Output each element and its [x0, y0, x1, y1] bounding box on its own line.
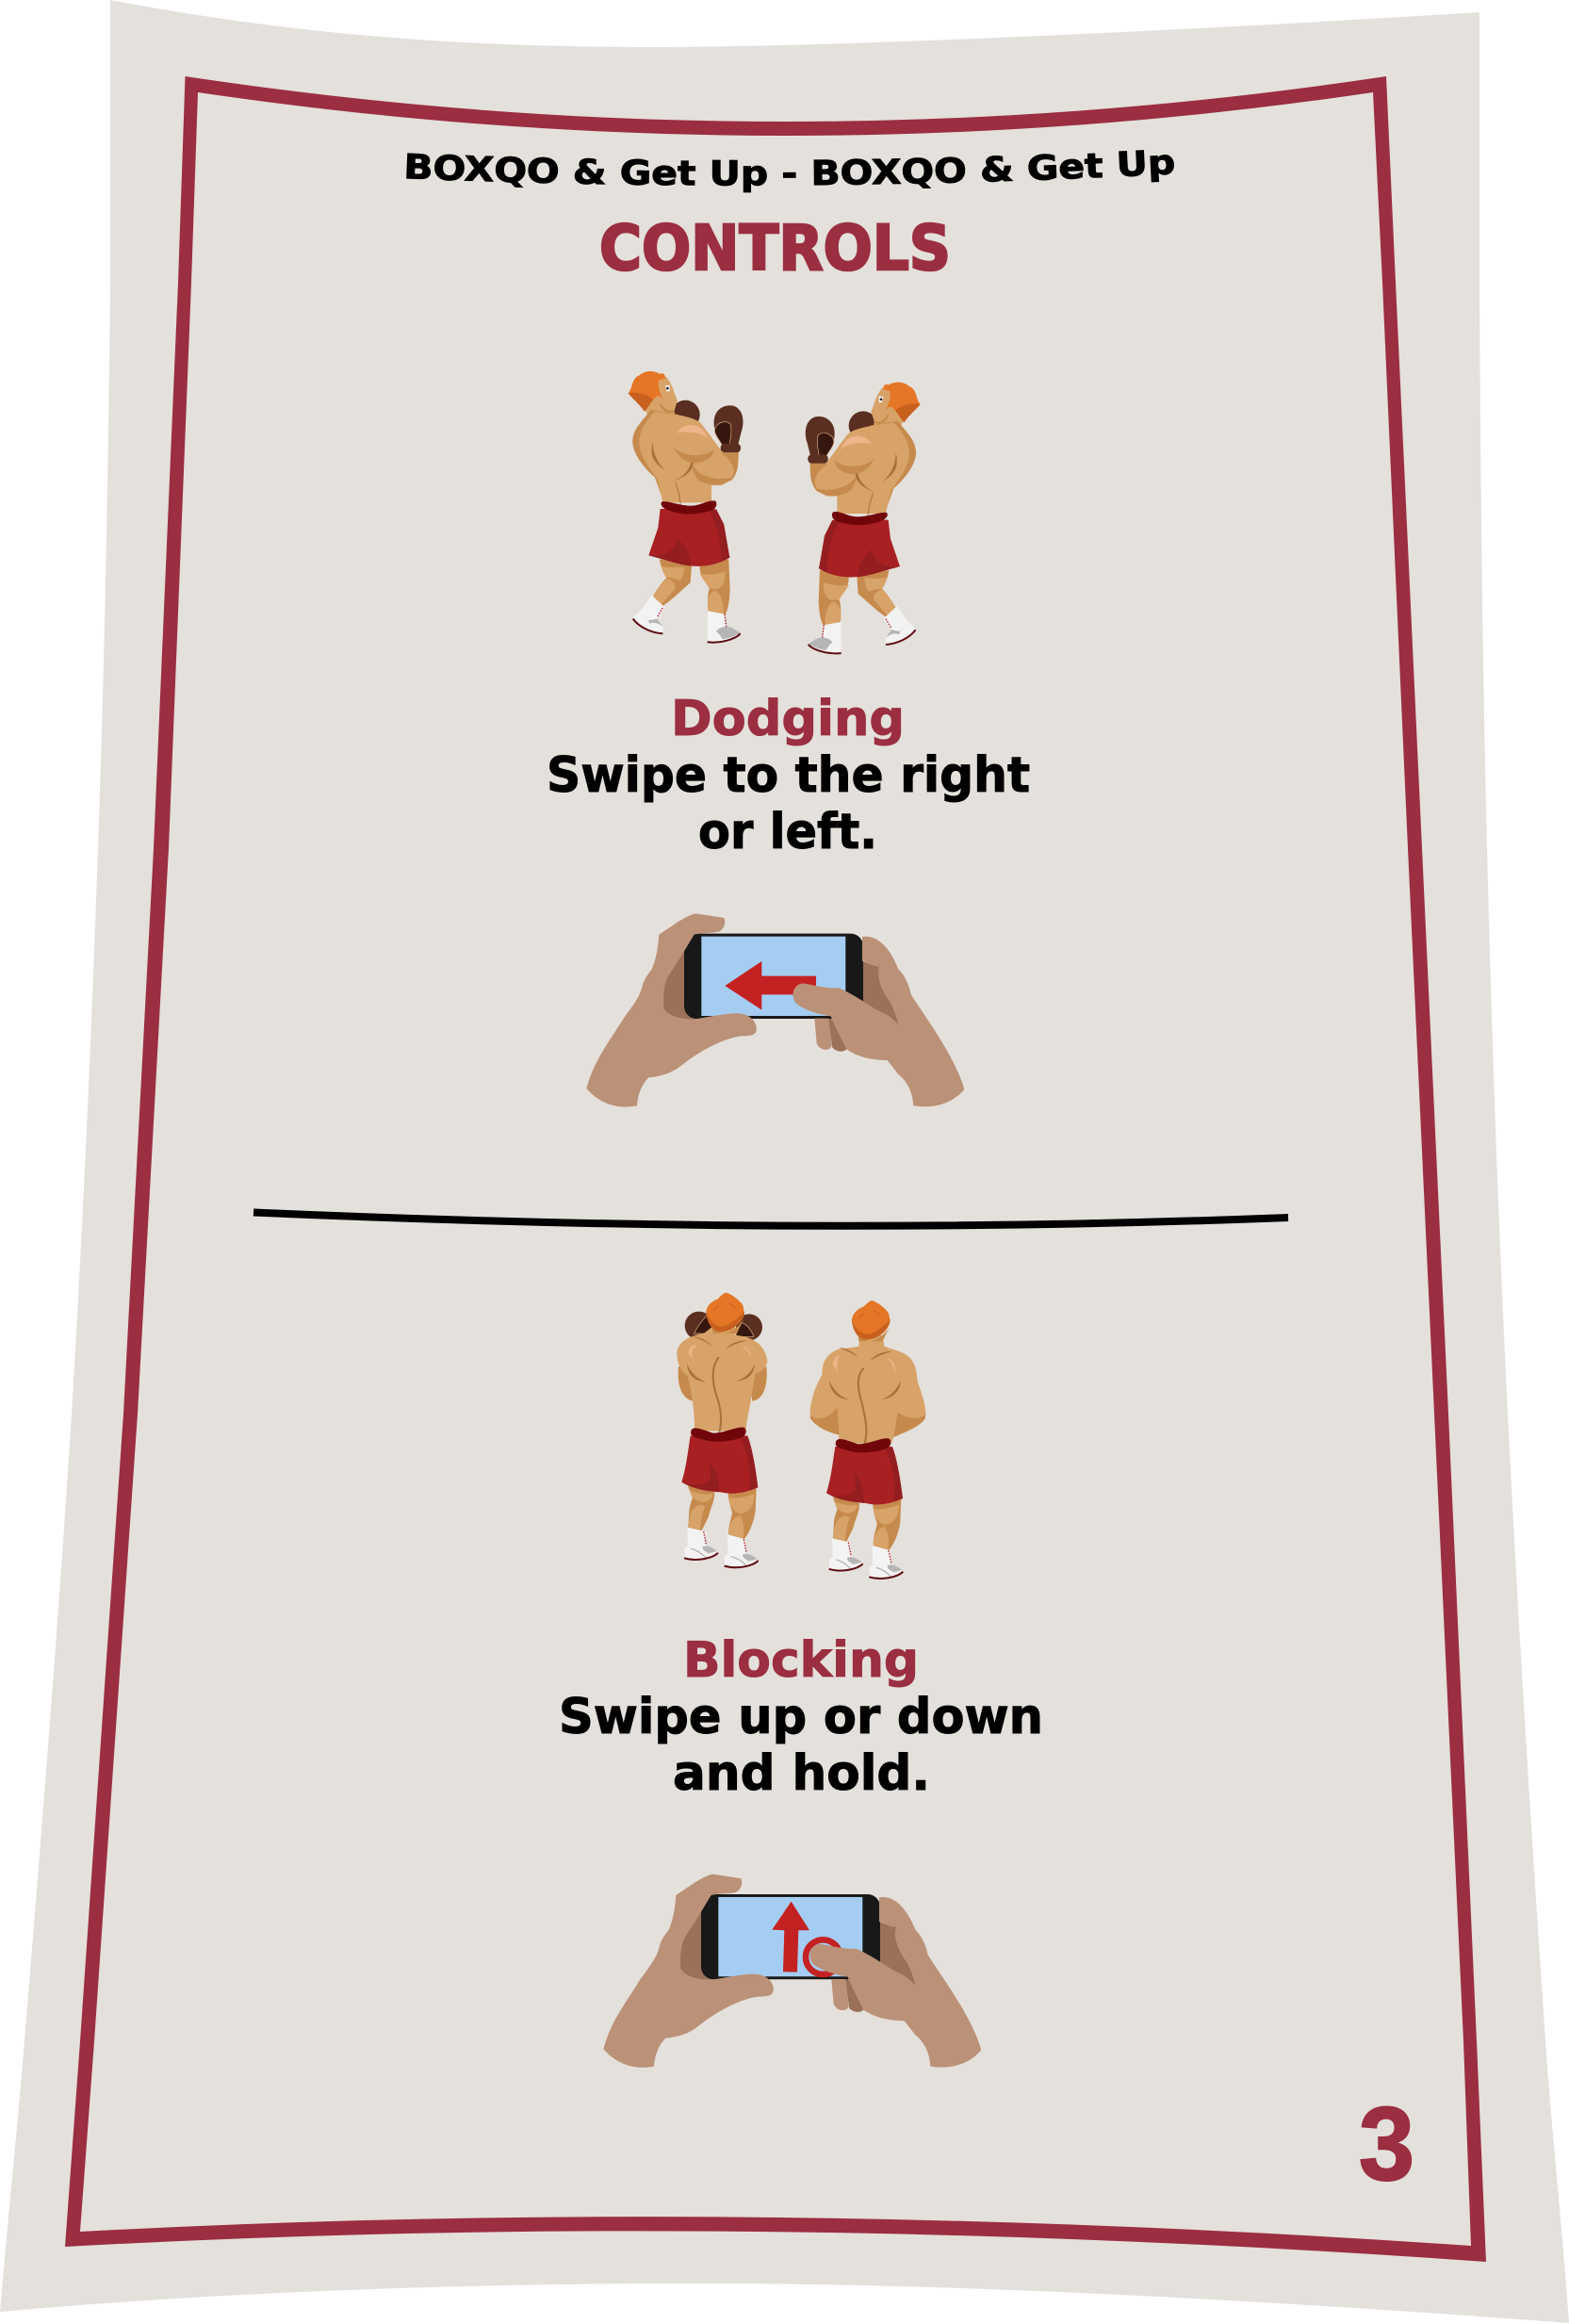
- text: dodging instructions: Swipe to the right: [547, 747, 1030, 804]
- icon: hands holding phone with up arrow and touch circle: [603, 1874, 981, 2068]
- divider: [253, 1212, 1288, 1226]
- text: blocking instructions: and hold.: [673, 1745, 930, 1802]
- text: dodging instructions: or left.: [698, 804, 877, 860]
- page number: 3: [1359, 2087, 1414, 2202]
- illustration: two boxers dodging: [629, 371, 921, 653]
- header line: BOXQO & Get Up - BOXQO & Get Up: [406, 150, 1174, 192]
- text: dodging instructions: [547, 747, 1030, 860]
- icon: hands holding phone with left arrow: [586, 913, 964, 1107]
- text: blocking instructions: Swipe up or down: [559, 1689, 1043, 1745]
- illustration: two boxers blocking, rear view: [677, 1293, 925, 1579]
- title: CONTROLS: [599, 212, 951, 285]
- text: blocking instructions: [559, 1689, 1043, 1802]
- heading: Blocking: Blocking: [683, 1632, 919, 1689]
- heading: Dodging: Dodging: [671, 691, 905, 747]
